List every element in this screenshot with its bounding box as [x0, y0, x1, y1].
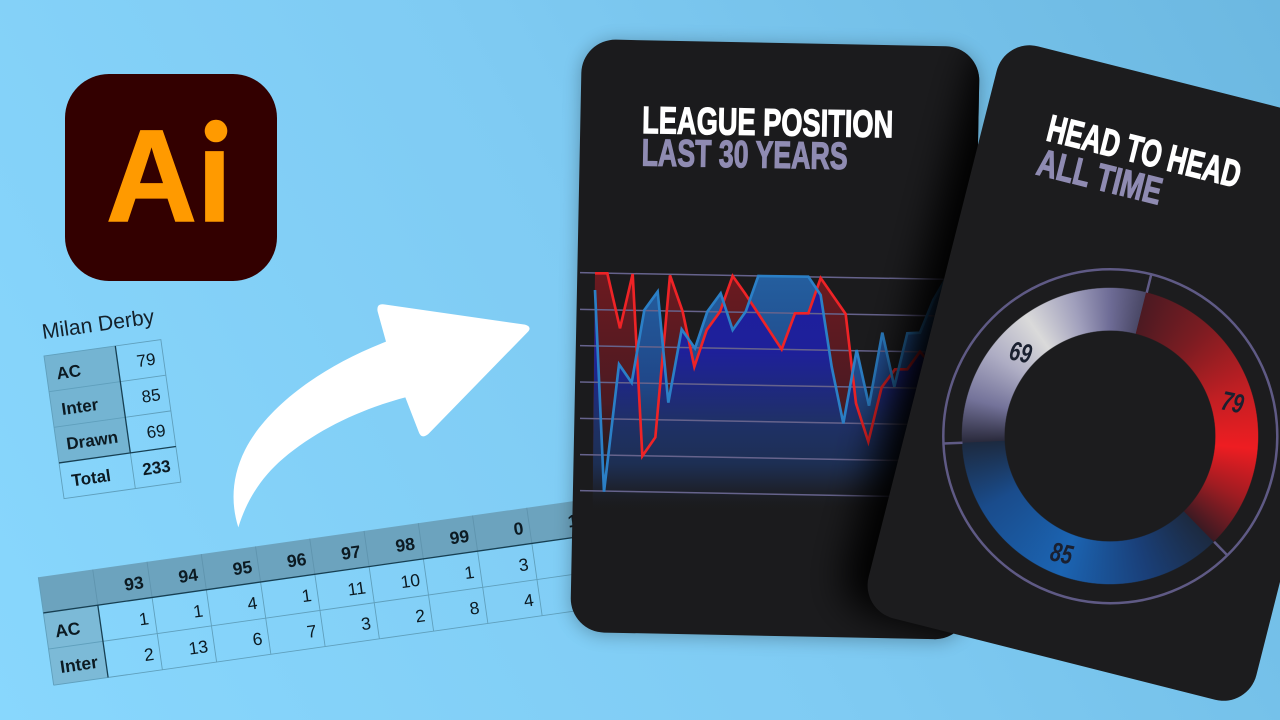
- summary table grid: Drawn: [65, 428, 119, 454]
- card body: [860, 38, 1280, 708]
- card shadow: [570, 41, 980, 642]
- long table: season positions: 11: [346, 577, 367, 600]
- icon: Adobe Illustrator logo: Ai: [106, 102, 232, 249]
- long table: season positions: 95: [231, 557, 254, 579]
- summary table grid: 85: [140, 385, 162, 407]
- long table: season positions: 10: [399, 570, 422, 592]
- outer ring and ticks: [943, 269, 1277, 603]
- long table: season positions: 4: [246, 593, 259, 614]
- shadow cast by second card: [836, 51, 980, 640]
- heading: ALL TIME: [1033, 142, 1166, 213]
- long table: season positions: [38, 484, 707, 685]
- long table: season positions: 1: [463, 562, 476, 583]
- long table: season positions: Inter: [59, 652, 99, 677]
- summary table grid: AC: [55, 361, 82, 383]
- summary table grid: 79: [135, 350, 157, 371]
- long table: season positions: 96: [286, 549, 308, 572]
- long table: season positions: 6: [251, 628, 264, 650]
- value labels: 69: [1007, 336, 1035, 369]
- heading: [641, 100, 894, 179]
- grid lines: [580, 273, 963, 498]
- value labels: 85: [1048, 537, 1076, 571]
- red area: [593, 274, 897, 466]
- long table: season positions: 97: [340, 541, 362, 564]
- long table: season positions: 0: [512, 518, 525, 539]
- long table: season positions: 93: [123, 572, 145, 595]
- small table: Milan Derby: [40, 305, 181, 499]
- line chart: [580, 51, 980, 640]
- summary table grid: [44, 340, 181, 499]
- value labels: 79: [1219, 386, 1247, 419]
- value labels: [1007, 336, 1247, 571]
- arrow: [234, 304, 530, 527]
- heading: LAST 30 YEARS: [641, 133, 848, 178]
- long table: season positions: 7: [305, 621, 318, 642]
- summary table grid: Total: [70, 466, 112, 490]
- donut ring segments: [960, 286, 1260, 586]
- long table: season positions: AC: [54, 618, 82, 641]
- long table: season positions: 1: [566, 510, 579, 532]
- long table: season positions: 13: [187, 636, 209, 659]
- panel: head to head card: [860, 38, 1280, 708]
- long table: season positions: 2: [143, 644, 155, 665]
- red line: [595, 273, 930, 456]
- long table: season positions: 3: [360, 613, 372, 634]
- summary table grid: 69: [145, 421, 167, 442]
- long table: season positions: 2: [414, 605, 426, 626]
- heading: LEAGUE POSITION: [642, 100, 894, 146]
- icon: Adobe Illustrator logo: [65, 74, 277, 281]
- long table: season positions: 8: [468, 598, 481, 619]
- long table: season positions: 1: [300, 585, 313, 606]
- donut chart: [943, 269, 1277, 603]
- table title: Milan Derby: [40, 305, 156, 344]
- long table: season positions: 98: [394, 533, 416, 556]
- summary table grid: Inter: [60, 395, 100, 419]
- card body: [570, 39, 980, 640]
- summary table grid: 233: [141, 457, 172, 479]
- overlap area: [593, 292, 913, 476]
- long table: season positions: 99: [448, 526, 471, 548]
- long table: season positions: 1: [192, 601, 204, 622]
- blue area: [593, 277, 941, 476]
- long table: season positions: 94: [177, 564, 199, 587]
- panel: league position card: [561, 32, 989, 651]
- long table: season positions: 4: [522, 590, 535, 611]
- long table: season positions: 1: [138, 608, 150, 629]
- long table: season positions: 3: [517, 554, 530, 575]
- blue line: [595, 270, 963, 492]
